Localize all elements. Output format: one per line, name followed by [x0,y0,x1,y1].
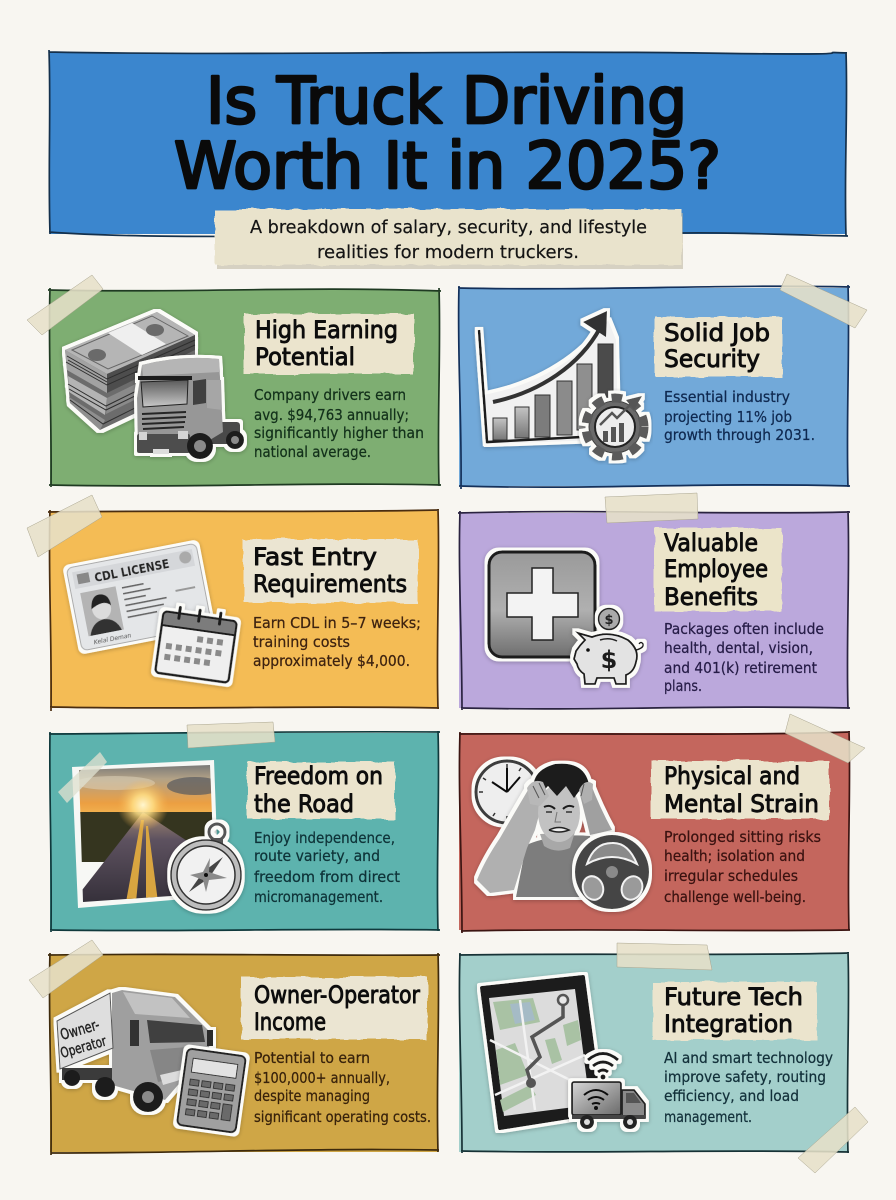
icon: calculator [177,1048,246,1133]
body text: Potential to earn [254,1049,370,1067]
heading label: Benefits [664,583,758,611]
body text: micromanagement. [254,888,383,906]
heading label [651,761,829,819]
body text: Enjoy independence, [254,829,395,847]
subtitle paper strip [215,209,683,269]
body text: projecting 11% job [664,408,792,426]
panel: Future Tech Integration [459,952,849,1153]
body text: and 401(k) retirement [664,659,817,677]
icon: money stack [65,312,195,430]
heading label: the Road [254,790,354,818]
title: Is Truck Driving [206,65,687,139]
body text [664,388,815,444]
body text: challenge well-being. [664,888,806,906]
icon: wall clock [476,761,538,823]
icon: compass [171,824,241,910]
panel: Physical and Mental Strain [459,731,850,933]
icon: calendar [155,605,238,683]
icon: semi truck [137,358,244,459]
body text [254,1049,431,1126]
body text: freedom from direct [254,868,400,886]
body text: significantly higher than [254,424,424,442]
heading label: Valuable [664,529,758,557]
body text: AI and smart technology [664,1049,833,1067]
panel: Valuable Employee Benefits [458,511,850,710]
heading label: Future Tech [664,983,803,1011]
heading label: Fast Entry [253,543,377,571]
icon: piggy bank with coin: $ [604,613,614,628]
panel: Solid Job Security [458,285,850,489]
heading label [243,539,418,603]
icon: piggy bank with coin [574,608,643,684]
body text: approximately $4,000. [253,652,410,670]
icon: CDL license card [66,543,212,651]
body text [664,828,821,906]
icon: stressed driver [477,764,612,897]
heading label: High Earning [255,316,398,344]
icon: steering wheel [575,835,649,909]
heading label: Security [664,345,760,373]
decorative tape strips [27,274,868,1173]
panel: Fast Entry Requirements [48,509,439,711]
heading label: Freedom on [254,762,383,790]
icon: growth bar chart [477,311,618,444]
body text: despite managing [254,1087,370,1105]
body text: Essential industry [664,388,790,406]
heading label [653,982,817,1040]
body text: growth through 2031. [664,426,815,444]
heading label [654,317,782,377]
heading label: Integration [664,1010,793,1038]
heading label: Potential [255,343,355,371]
heading label [247,762,395,819]
body text: significant operating costs. [254,1108,431,1126]
subtitle paper strip: A breakdown of salary, security, and lifestyle [250,217,647,238]
body text: $100,000+ annually, [254,1069,390,1087]
body text: national average. [254,443,371,461]
title [174,65,721,204]
body text [664,620,824,695]
body text: improve safety, routing [664,1068,826,1086]
icon: road photo [70,760,225,908]
body text: Company drivers earn [254,386,406,404]
body text: plans. [664,677,702,695]
heading label: Income [254,1008,326,1036]
heading label [241,977,427,1039]
heading label [244,314,414,374]
body text: training costs [253,633,350,651]
body text: irregular schedules [664,867,798,885]
body text: Packages often include [664,620,824,638]
body text: management. [664,1108,752,1126]
body text [664,1049,833,1126]
heading label: Physical and [664,762,800,790]
body text: health, dental, vision, [664,639,813,657]
panel: High Earning Potential [48,288,441,487]
icon: connected delivery truck [572,1054,645,1129]
icon: medical cross [489,552,595,657]
header banner [49,50,848,269]
icon: gear [586,396,644,456]
heading label: Owner-Operator [254,981,420,1009]
heading label: Mental Strain [664,790,819,818]
icon: piggy bank with coin: $ [601,646,617,674]
body text: Prolonged sitting risks [664,828,821,846]
heading label: Solid Job [664,319,770,347]
panel: Freedom on the Road [49,731,440,932]
title: Worth It in 2025? [174,130,721,204]
tape on photo [58,752,107,803]
icon: CDL license card: CDL LICENSE [93,557,171,585]
body text: Earn CDL in 5–7 weeks; [253,614,421,632]
icon: CDL license card: Kelal Deman [93,632,132,646]
body text [254,829,400,906]
icon: owner-operator truck: Owner- [58,1016,102,1044]
icon: owner-operator truck: Operator [59,1033,108,1062]
icon: tablet with map [482,977,601,1128]
body text [254,386,424,461]
body text: health; isolation and [664,847,805,865]
heading label: Requirements [253,570,407,598]
body text: efficiency, and load [664,1087,799,1105]
panel: Owner-Operator Income [48,953,440,1155]
body text [253,614,421,670]
heading label [654,528,782,611]
icon: owner-operator truck [57,990,213,1112]
body text: route variety, and [254,847,380,865]
subtitle paper strip: realities for modern truckers. [317,242,579,263]
body text: avg. $94,763 annually; [254,406,409,424]
heading label: Employee [664,555,768,583]
